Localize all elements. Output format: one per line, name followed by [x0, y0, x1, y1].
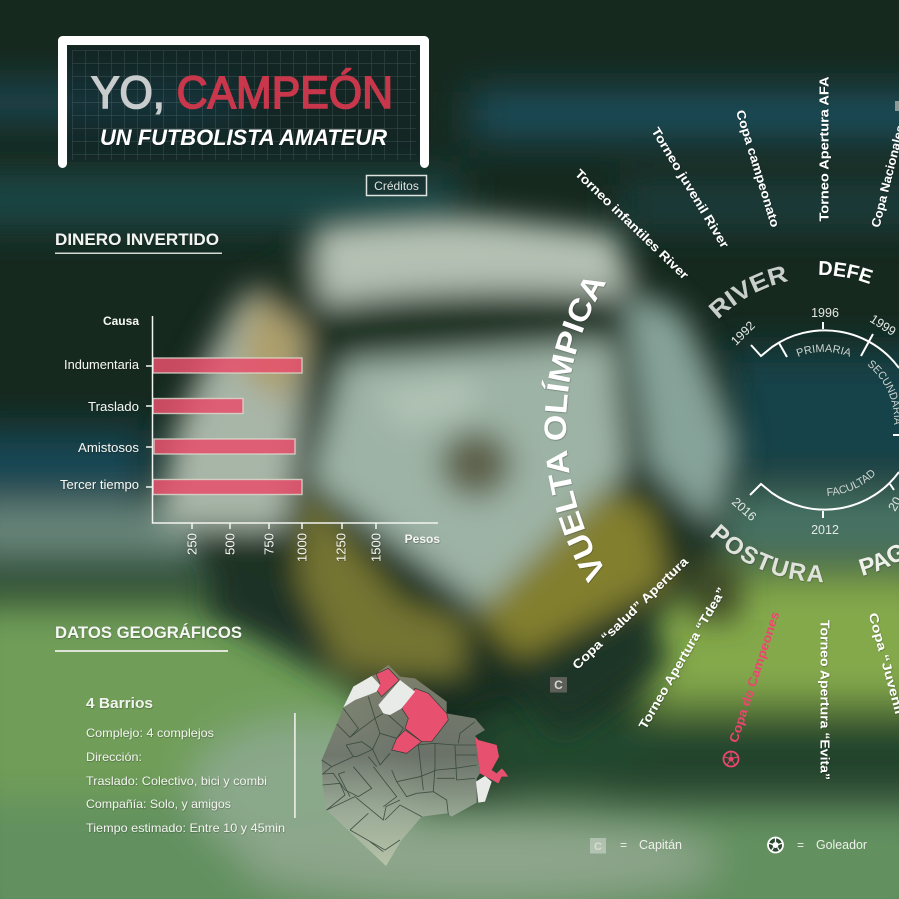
radial tournaments list: Torneo infantiles River [572, 167, 691, 282]
text block: barrios: Traslado: Colectivo, bici y combi [86, 774, 267, 788]
axis labels: Causa [103, 314, 139, 328]
icon: pink goal scorer ball [724, 752, 738, 766]
icon: captain badge [550, 677, 567, 692]
word: defe: DEFE [819, 261, 874, 284]
axis labels: 1500 [368, 533, 384, 562]
text block: barrios: Complejo: 4 complejos [86, 726, 214, 740]
bar: amistosos [154, 439, 295, 454]
credits button [366, 176, 426, 196]
title text: YO, CAMPEÓN [91, 67, 393, 118]
legend: capitan: Capitán [639, 838, 682, 852]
word: postura: POSTURA [710, 524, 824, 584]
legend: goleador [768, 838, 867, 852]
axis labels: Tercer tiempo [60, 477, 139, 492]
timeline labels: 2012 [811, 523, 839, 537]
radial tournaments list: Copa “salud” Apertura [570, 554, 692, 672]
radial tournaments list: Torneo juvenil River [649, 125, 732, 251]
bar chart: money invested [60, 314, 440, 562]
bar: traslado [153, 398, 243, 414]
timeline labels: 1996 [811, 306, 839, 320]
text block: barrios: Dirección: [86, 750, 142, 764]
highlighted barrios [376, 668, 508, 783]
axis labels: 250 [184, 533, 200, 555]
axis labels: 500 [222, 533, 238, 555]
legend: capitan: = [620, 838, 627, 852]
axis labels: Pesos [405, 532, 440, 546]
legend: goleador: Goleador [816, 838, 867, 852]
timeline stages: PRIMARIA [796, 344, 850, 357]
icon: captain badge: C [554, 678, 563, 692]
subtitle: UN FUTBOLISTA AMATEUR [100, 125, 387, 150]
axis labels: Amistosos [78, 440, 139, 455]
radial tournaments list: Torneo Apertura AFA [818, 76, 832, 222]
radial tournaments list: Torneo Apertura “Tdea” [636, 585, 729, 731]
heading: dinero invertido: DINERO INVERTIDO [55, 231, 219, 249]
timeline ring [728, 306, 899, 537]
text block: barrios: Compañía: Solo, y amigos [86, 797, 231, 811]
axis labels [60, 314, 440, 562]
text block: barrios: 4 Barrios [86, 695, 153, 712]
ball dark body [170, 215, 740, 685]
credits button: Créditos [374, 179, 419, 193]
radial tournaments list: Torneo Apertura “Evita” [818, 620, 832, 780]
timeline labels [728, 306, 899, 537]
timeline labels: 2016 [729, 495, 759, 524]
legend: goleador: = [797, 838, 804, 852]
icon: partial captain badge at edge [895, 101, 899, 111]
text block: barrios: Tiempo estimado: Entre 10 y 45min [86, 821, 285, 835]
legend: capitan [590, 838, 682, 854]
axis labels: 1250 [334, 533, 348, 562]
curved words around timeline [542, 261, 899, 584]
map: Buenos Aires barrios [322, 665, 508, 866]
word: river: RIVER [708, 266, 788, 319]
heading: datos geograficos: DATOS GEOGRÁFICOS [55, 623, 242, 642]
timeline stages [796, 344, 899, 496]
text block: barrios [86, 695, 285, 835]
axis labels: Indumentaria [64, 357, 140, 372]
highlighted tournament: copa de campeones: Copa de Campeones [727, 610, 782, 744]
radial tournaments list: Copa campeonato [733, 108, 782, 229]
timeline stages: FACULTAD [827, 470, 874, 496]
axis labels: 750 [262, 533, 276, 555]
word: vuelta olimpica: VUELTA OLÍMPICA [542, 280, 606, 584]
title: goal with net [62, 40, 424, 164]
bar: tercer tiempo [153, 480, 302, 494]
axis labels: 1000 [294, 533, 310, 562]
timeline labels: 1999 [867, 312, 898, 339]
legend: capitan: C [594, 841, 602, 853]
timeline labels: 1992 [728, 319, 758, 348]
ball panels [312, 218, 625, 305]
radial tournaments list [570, 76, 899, 780]
bar: indumentaria [153, 358, 302, 373]
axis labels: Traslado [88, 399, 139, 414]
